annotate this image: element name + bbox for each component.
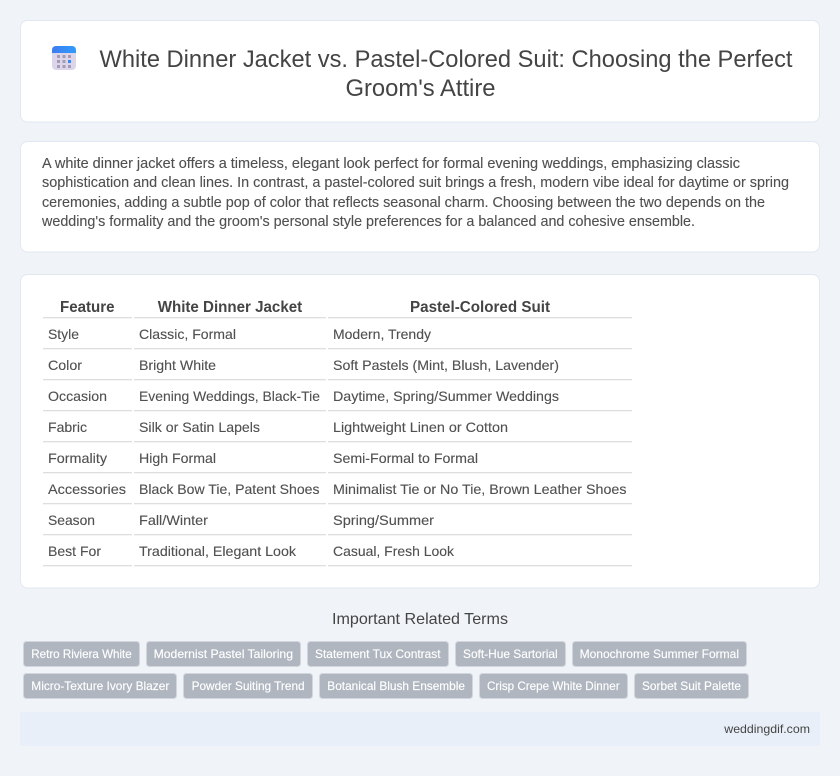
- text block: intro: wedding's formality and the groom's personal style preferences for a balanced and cohesive ensemble.: [41, 214, 695, 230]
- table header: Pastel-Colored Suit: [410, 299, 550, 316]
- text block: intro: ceremonies, adding a subtle pop of color that reflects seasonal charm. Choosing between the two depends on the: [42, 195, 765, 211]
- row: fabric: Silk or Satin Lapels: [139, 419, 260, 435]
- table header: White Dinner Jacket: [158, 299, 302, 316]
- row: accessories: Minimalist Tie or No Tie, Brown Leather Shoes: [333, 481, 626, 497]
- row: accessories: Accessories: [48, 481, 126, 497]
- row: accessories: Black Bow Tie, Patent Shoes: [139, 481, 320, 497]
- row: season: Fall/Winter: [139, 512, 208, 528]
- row: occasion: Daytime, Spring/Summer Weddings: [333, 388, 559, 404]
- row: formality: Semi-Formal to Formal: [333, 450, 478, 466]
- table header: [60, 299, 550, 316]
- heading: related terms: Important Related Terms: [332, 611, 508, 628]
- title: [100, 46, 793, 102]
- panel: comparison table: [20, 274, 820, 588]
- row: formality: High Formal: [139, 450, 216, 466]
- row: best for: Best For: [48, 543, 101, 559]
- icon: calendar: [52, 46, 76, 70]
- row: fabric: Lightweight Linen or Cotton: [333, 419, 508, 435]
- table rules: [43, 317, 632, 566]
- row: style: Classic, Formal: [139, 326, 236, 342]
- text block: intro: [41, 156, 789, 230]
- related term tags: Monochrome Summer Formal: [580, 647, 739, 661]
- row: color: Soft Pastels (Mint, Blush, Lavender): [333, 357, 559, 373]
- footer: [20, 712, 820, 746]
- row: fabric: Fabric: [48, 419, 87, 435]
- row: season: Season: [48, 512, 95, 528]
- panel: intro paragraph: [20, 142, 820, 252]
- row: color: Color: [48, 357, 82, 373]
- related term tags: Soft-Hue Sartorial: [463, 647, 558, 661]
- row: season: [48, 512, 434, 528]
- footer: weddingdif.com: [723, 722, 810, 736]
- table header: Feature: [60, 299, 115, 316]
- related term tags: Statement Tux Contrast: [315, 647, 441, 661]
- row: accessories: [48, 481, 626, 497]
- row: best for: Traditional, Elegant Look: [139, 543, 297, 559]
- row: color: [48, 357, 559, 373]
- row: occasion: Occasion: [48, 388, 107, 404]
- row: style: [48, 326, 431, 342]
- title: Groom's Attire: [346, 75, 496, 102]
- row: color: Bright White: [139, 357, 216, 373]
- related term tags: Powder Suiting Trend: [192, 679, 305, 693]
- related term tags: Crisp Crepe White Dinner: [487, 679, 620, 693]
- related term tags: Botanical Blush Ensemble: [327, 679, 465, 693]
- row: formality: [48, 450, 478, 466]
- row: best for: Casual, Fresh Look: [333, 543, 455, 559]
- panel: title card: [20, 20, 820, 122]
- row: occasion: Evening Weddings, Black-Tie: [139, 388, 320, 404]
- row: occasion: [48, 388, 559, 404]
- row: style: Style: [48, 326, 79, 342]
- related term tags: [24, 642, 748, 698]
- related term tags: Retro Riviera White: [31, 647, 132, 661]
- related term tags: Sorbet Suit Palette: [642, 679, 741, 693]
- row: formality: Formality: [48, 450, 107, 466]
- related term tags: Modernist Pastel Tailoring: [154, 647, 293, 661]
- row: best for: [48, 543, 455, 559]
- related term tags: Micro-Texture Ivory Blazer: [31, 679, 169, 693]
- text block: intro: A white dinner jacket offers a timeless, elegant look perfect for formal evening weddings, emphasizing classic: [42, 156, 740, 172]
- row: style: Modern, Trendy: [333, 326, 431, 342]
- title: White Dinner Jacket vs. Pastel-Colored Suit: Choosing the Perfect: [100, 46, 793, 73]
- row: season: Spring/Summer: [333, 512, 434, 528]
- row: fabric: [48, 419, 508, 435]
- text block: intro: sophistication and clean lines. In contrast, a pastel-colored suit brings a fresh, modern vibe ideal for daytime or spring: [42, 175, 789, 191]
